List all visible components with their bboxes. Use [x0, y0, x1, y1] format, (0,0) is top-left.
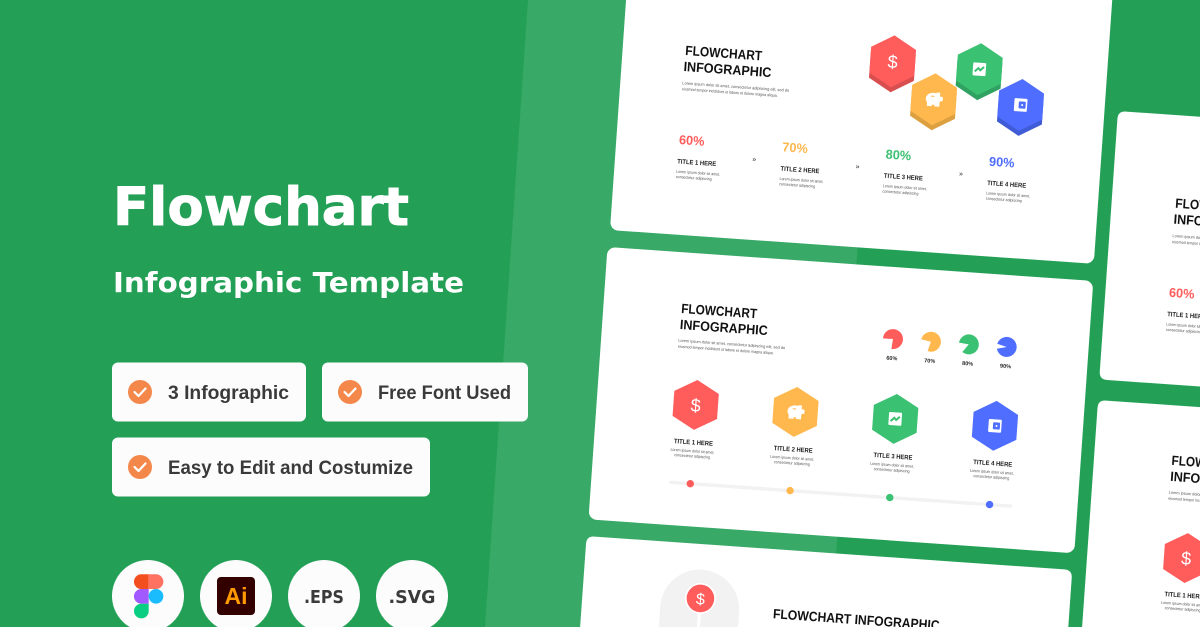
badge: EPS format [288, 560, 360, 627]
step 1: 60% [1169, 285, 1195, 302]
step 3 text: TITLE 3 HERE [873, 452, 913, 462]
subheading: Infographic Template: Infographic Template [113, 266, 464, 299]
step 3 [882, 146, 930, 197]
stem below dollar marker [698, 612, 700, 627]
icon: red hexagon with dollar [1162, 532, 1200, 585]
slide content [1166, 196, 1200, 339]
dollar marker: $ [695, 591, 705, 609]
icon: red hexagon with dollar: $ [887, 52, 898, 72]
panel: partial slide at lower right [1082, 401, 1200, 627]
pie chart 60% [881, 328, 904, 363]
icon: green hexagon with chart [955, 42, 1004, 102]
step 1: TITLE 1 HERE [677, 158, 717, 168]
slide heading: INFOGRAPHIC [683, 59, 772, 80]
pie chart 90%: 90% [1000, 364, 1011, 370]
slide description: Lorem ipsum dolor sit amet, consectetur adipiscing elit, sed do [682, 80, 790, 93]
step 4 text: TITLE 4 HERE [973, 459, 1013, 469]
icon: Figma logo [112, 560, 184, 627]
feature badge: Free Font Used [322, 362, 528, 422]
step 1 [676, 132, 723, 182]
step 1 text [670, 438, 715, 460]
step 4 text: consectetur adipiscing [973, 473, 1010, 481]
step 2 text: Lorem ipsum dolor sit amet, [770, 454, 814, 462]
icon: Adobe Illustrator logo [200, 560, 272, 627]
pie chart 90% [995, 336, 1017, 371]
step 2 [779, 139, 826, 189]
step 3: 80% [885, 147, 912, 163]
step 4: 90% [989, 154, 1015, 171]
step 2: consectetur adipiscing [779, 181, 815, 189]
slide description: Lorem ipsum dolor sit amet, consectetur adipiscing elit, sed do [678, 338, 786, 350]
panel: partial slide at the bottom [580, 537, 1072, 627]
slide heading [1173, 196, 1200, 233]
step 1 text: Lorem ipsum dolor sit amet, [670, 447, 715, 455]
step 2 text: consectetur adipiscing [774, 459, 810, 467]
feature badge: 3 Infographic: 3 Infographic [168, 383, 289, 404]
icon: red hexagon with dollar: $ [1180, 548, 1192, 569]
step 3: Lorem ipsum dolor sit amet, [883, 183, 927, 191]
step 2 text: TITLE 2 HERE [773, 445, 813, 455]
feature badge: Easy to Edit and Costumize: Easy to Edit and Costumize [168, 458, 413, 479]
slide heading: FLOWCHART [681, 301, 758, 321]
slide content [1160, 453, 1200, 617]
feature badge: Free Font Used: Free Font Used [378, 383, 511, 404]
step 4 text [969, 459, 1014, 481]
icon: blue hexagon with wallet [971, 399, 1019, 452]
icon: green hexagon with chart [871, 392, 919, 445]
step 4: TITLE 4 HERE [987, 180, 1027, 190]
icon: red hexagon with dollar [868, 34, 917, 94]
slide heading: INFOGRAPHIC [679, 317, 769, 338]
step 1: 60% [679, 132, 705, 149]
step 3: TITLE 3 HERE [884, 173, 924, 183]
badge: SVG format [376, 560, 448, 627]
slide heading: FLOWCHART [685, 43, 763, 63]
slide heading [1170, 453, 1200, 490]
slide description: eiusmod tempor incididunt ut labore et dolore magna aliqua. [678, 344, 774, 355]
slide description [1172, 233, 1200, 252]
arrow 1: » [752, 156, 756, 164]
step 4: Lorem ipsum dolor sit amet, [986, 190, 1030, 198]
pie chart 60%: 60% [886, 356, 898, 362]
slide description [678, 338, 786, 356]
timeline with dots [669, 478, 1012, 510]
step 1 [1166, 285, 1200, 335]
step 3: consectetur adipiscing [882, 188, 919, 196]
step 1 text: TITLE 1 HERE [674, 438, 714, 448]
pie chart 70%: 70% [924, 358, 935, 365]
pie chart 70% [920, 331, 942, 365]
step 4: consectetur adipiscing [986, 196, 1022, 203]
badge: EPS format: .EPS [304, 588, 344, 608]
step 3 text [870, 452, 915, 474]
step 2: Lorem ipsum dolor sit amet, [779, 176, 824, 184]
icon: red hexagon with dollar [672, 378, 720, 431]
slide heading [679, 301, 770, 338]
feature badge: 3 Infographic [112, 362, 306, 422]
grey pill background [659, 570, 739, 627]
slide description [1168, 490, 1200, 508]
pie chart 80% [957, 334, 980, 368]
arrow 3: » [959, 171, 963, 178]
step 4 text: Lorem ipsum dolor sit amet, [970, 468, 1014, 476]
step 1: consectetur adipiscing [676, 174, 712, 182]
icon: orange hexagon with piggy bank [771, 385, 819, 438]
arrow 2: » [855, 164, 860, 171]
step 3 text: Lorem ipsum dolor sit amet, [870, 461, 914, 469]
feature badge: Easy to Edit and Costumize [112, 438, 430, 496]
pie chart 80%: 80% [962, 361, 973, 368]
badge: SVG format: .SVG [388, 588, 436, 608]
icon: blue hexagon with wallet [996, 77, 1045, 137]
dollar marker [684, 582, 717, 615]
panel: slide with pies, hexagons and timeline [588, 247, 1093, 553]
icon: red hexagon with dollar: $ [690, 395, 701, 416]
slide description: eiusmod tempor incididunt ut labore et dolore magna aliqua. [682, 86, 778, 98]
panel: partial slide at upper right [1100, 112, 1200, 386]
step 1 text: consectetur adipiscing [674, 452, 710, 460]
step 2 text [770, 445, 815, 467]
panel: slide with 3D hexagons and percentages [610, 0, 1113, 264]
step 4 [986, 154, 1033, 204]
icon: Adobe Illustrator logo: Ai [224, 583, 248, 609]
step 2: TITLE 2 HERE [780, 166, 820, 175]
step 2: 70% [782, 139, 809, 156]
step 3 text: consectetur adipiscing [874, 466, 910, 474]
icon: orange hexagon with piggy bank [909, 72, 958, 132]
step 1 text [1161, 591, 1200, 613]
slide heading [683, 43, 773, 80]
slide description [682, 80, 790, 99]
step 1: Lorem ipsum dolor sit amet, [676, 169, 720, 177]
light diagonal background band [485, 0, 875, 627]
heading: Flowchart: Flowchart [113, 177, 409, 238]
